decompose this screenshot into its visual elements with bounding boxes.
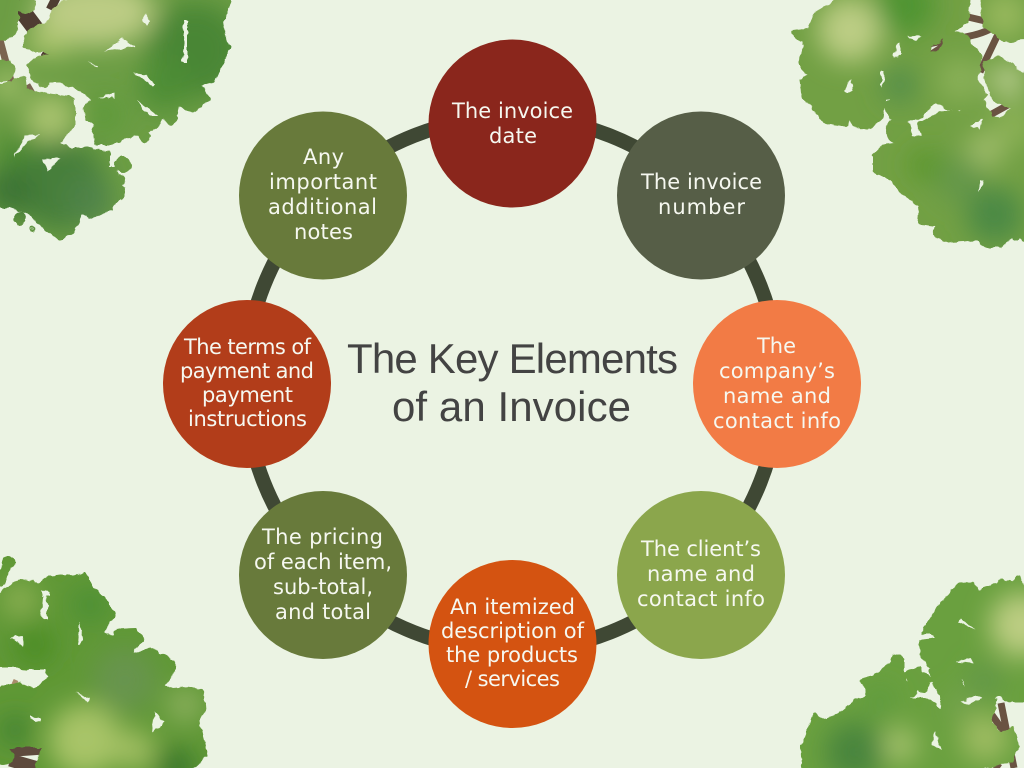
circle: pricing: of each item, [254,550,392,574]
circle: itemized description: / services [465,667,560,691]
circle: itemized description: An itemized [450,595,575,619]
circle: additional notes: Any [303,145,344,169]
circle: company info: company’s [719,359,835,383]
circle: company info: contact info [713,409,841,433]
icon: foliage top-right [780,0,1024,250]
circle: the invoice number: number [658,195,745,219]
icon: foliage bottom-right [800,575,1024,768]
circle: the invoice date: date [489,124,537,148]
circle: additional notes: notes [294,220,353,244]
circle: terms of payment: payment [202,383,293,407]
circle: the invoice number [617,112,785,280]
icon: foliage bottom-left [0,555,215,768]
circle: client info: contact info [637,587,765,611]
circle: the invoice date [428,40,596,208]
circle: additional notes: additional [268,195,377,219]
circle: company info: The [756,334,796,358]
ring connecting the circles [245,117,779,651]
circle: pricing: sub-total, [273,575,373,599]
circle: itemized description [428,560,596,728]
circle: company info: name and [723,384,831,408]
circle: client info: The client’s [640,537,761,561]
circle: the invoice date: The invoice [451,99,573,123]
circle: pricing [239,491,407,659]
circle: terms of payment: payment and [180,359,314,383]
circle: terms of payment [163,300,331,468]
circle: terms of payment: The terms of [183,335,312,359]
circle: pricing: and total [275,600,371,624]
title: of an Invoice [392,383,631,430]
circle: additional notes [239,112,407,280]
circle: terms of payment: instructions [188,407,307,431]
circle: the invoice number: The invoice [640,170,762,194]
circle: client info [617,491,785,659]
circle: additional notes: important [269,170,377,194]
icon: foliage top-left [0,0,243,250]
circle: itemized description: the products [446,643,578,667]
circle: company info [693,300,861,468]
circle: client info: name and [647,562,755,586]
circle: itemized description: description of [441,619,585,643]
title: The Key Elements [347,335,678,382]
circle: pricing: The pricing [261,525,383,549]
title [347,335,678,430]
